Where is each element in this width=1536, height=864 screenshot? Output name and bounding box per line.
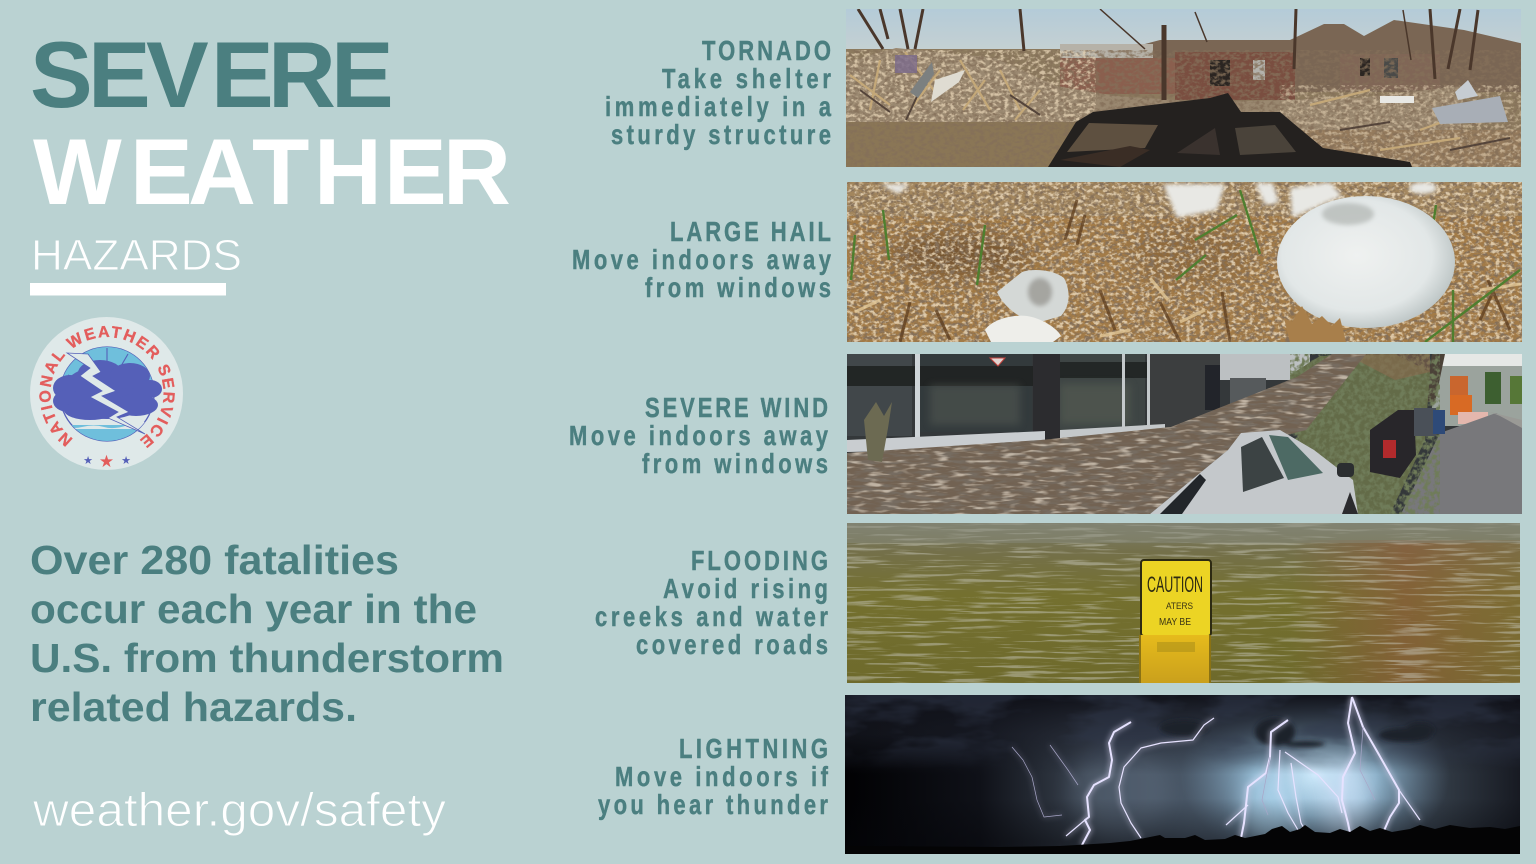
text block: flooding: creeks and water <box>595 602 828 633</box>
photo: tornado damage <box>846 9 1536 167</box>
treeline <box>922 825 1520 854</box>
caution sign: ATERS <box>1166 601 1193 612</box>
text block: severe wind: Move indoors away <box>569 421 828 452</box>
cloud <box>53 360 162 420</box>
logo: National Weather Service: NATIONAL WEATHER SERVICE <box>39 326 175 448</box>
statistic text block: occur each year in the <box>30 586 477 632</box>
text block: tornado: sturdy structure <box>611 120 831 151</box>
title: SEVERE <box>30 22 394 127</box>
statistic text block: related hazards. <box>30 684 357 730</box>
photo: large hail <box>847 182 1522 342</box>
text block: tornado <box>605 36 831 151</box>
title: WEATHER <box>33 119 511 224</box>
underline bar <box>30 283 226 296</box>
lightning bolts <box>1012 697 1420 845</box>
website link: weather.gov/safety <box>32 783 447 836</box>
text block: large hail: from windows <box>645 273 831 304</box>
text block: large hail: Move indoors away <box>572 245 831 276</box>
background hailstones <box>880 182 1437 218</box>
caution sign <box>1139 560 1211 683</box>
subtitle: hazards: HAZARDS <box>31 231 242 280</box>
text block: lightning: LIGHTNING <box>679 734 828 765</box>
text block: tornado: immediately in a <box>605 92 831 123</box>
parked cars <box>1370 410 1416 478</box>
caution sign: CAUTION <box>1147 572 1203 597</box>
text block: large hail <box>572 217 831 304</box>
photo: flooding <box>847 523 1520 683</box>
text block: tornado: TORNADO <box>702 36 831 67</box>
text block: severe wind: SEVERE WIND <box>645 393 828 424</box>
small hailstones <box>997 270 1069 323</box>
street and buildings <box>1432 366 1522 426</box>
logo: National Weather Service: ★ <box>121 454 131 467</box>
text block: large hail: LARGE HAIL <box>670 217 831 248</box>
photo: severe wind <box>847 354 1522 514</box>
lightning bolt <box>67 353 145 434</box>
text block: lightning <box>598 734 829 821</box>
text block: lightning: you hear thunder <box>598 790 828 821</box>
statistic text block <box>30 537 504 730</box>
text block: flooding: Avoid rising <box>663 574 828 605</box>
text block: flooding: covered roads <box>636 630 828 661</box>
text block: flooding <box>595 546 828 661</box>
fallen tree trunk <box>847 354 1366 514</box>
foliage <box>1290 354 1430 514</box>
photo: lightning <box>845 695 1520 854</box>
statistic text block: U.S. from thunderstorm <box>30 635 504 681</box>
logo: National Weather Service: ★ <box>99 452 114 472</box>
burned car <box>1048 93 1412 167</box>
caution sign: MAY BE <box>1159 617 1191 628</box>
large hailstone <box>1277 196 1455 328</box>
title <box>30 22 511 224</box>
text block: severe wind <box>569 393 828 480</box>
text block: severe wind: from windows <box>642 449 828 480</box>
statistic text block: Over 280 fatalities <box>30 537 399 583</box>
text block: tornado: Take shelter <box>662 64 831 95</box>
text block: lightning: Move indoors if <box>615 762 829 793</box>
text block: flooding: FLOODING <box>691 546 828 577</box>
silver car <box>1150 430 1358 514</box>
stars: ★ <box>83 454 93 467</box>
